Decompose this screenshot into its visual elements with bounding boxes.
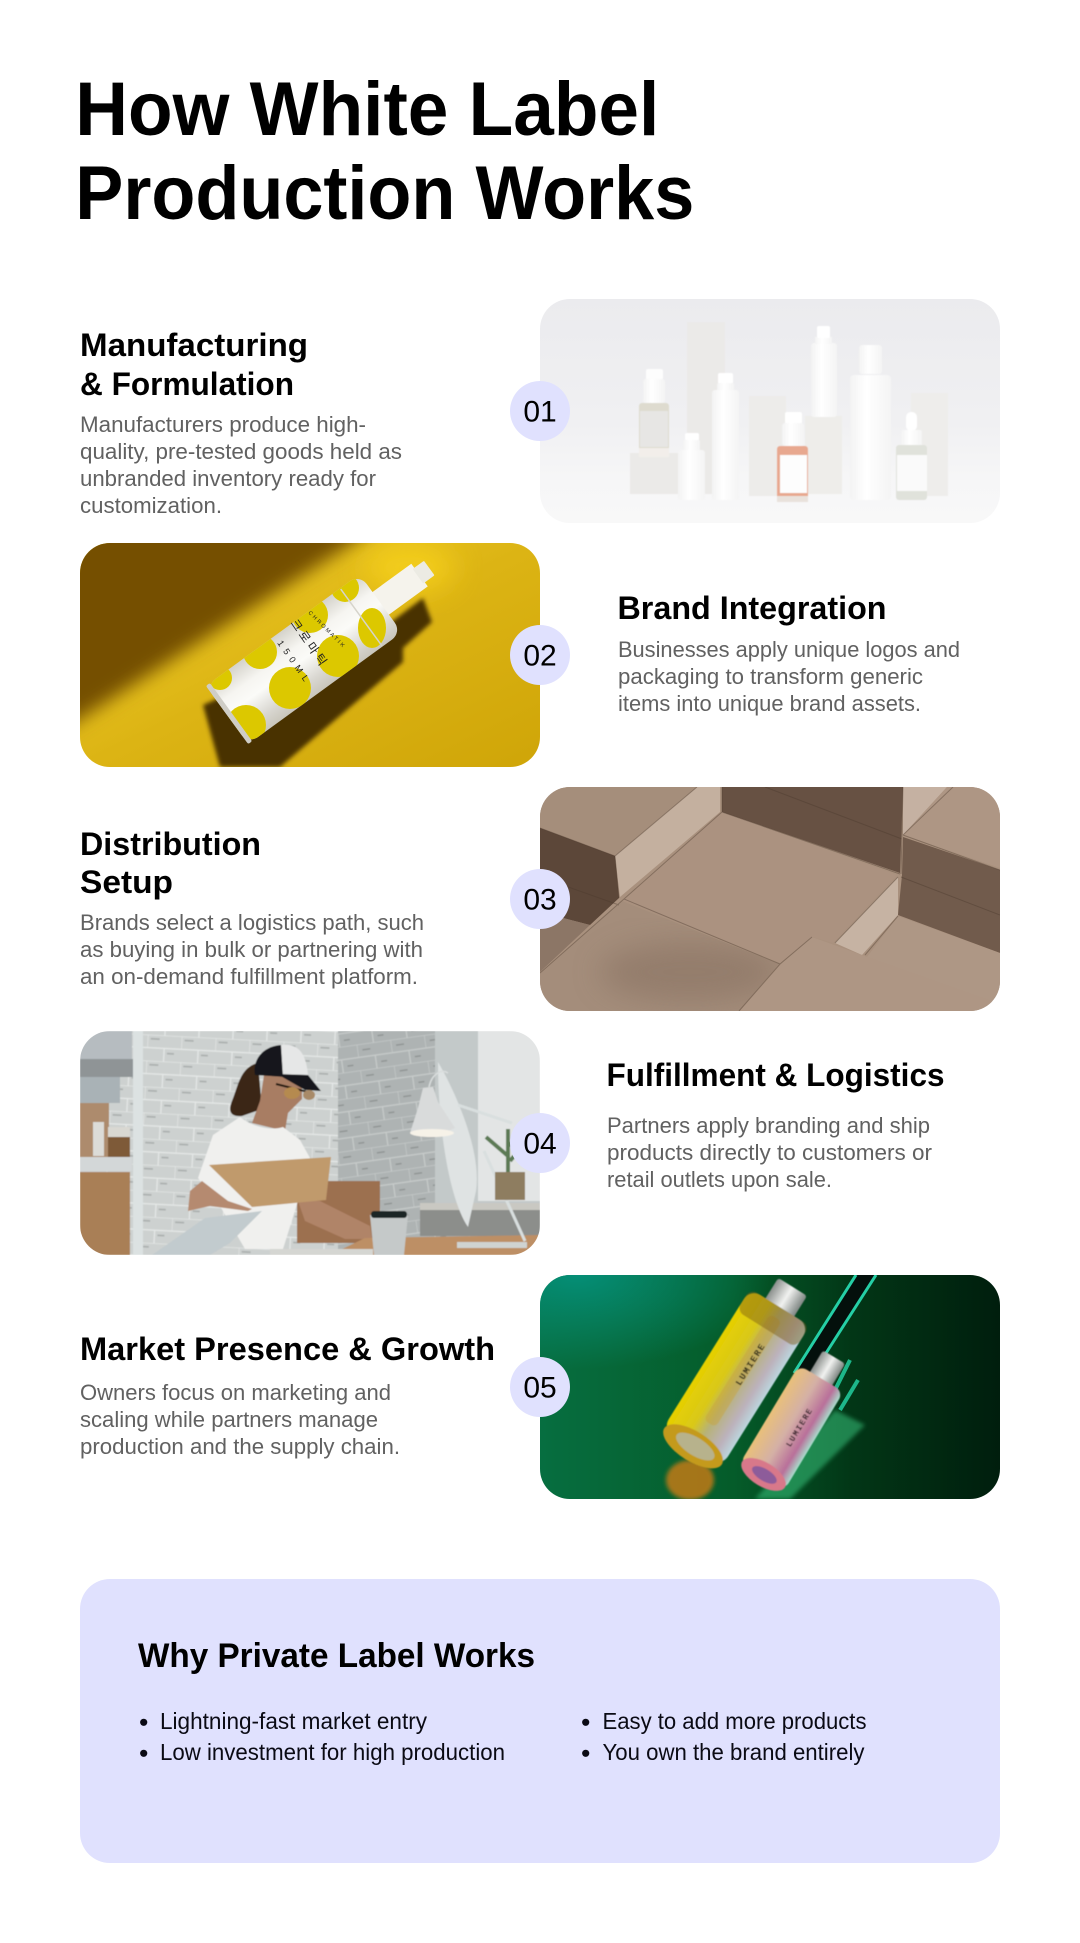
kraft envelope <box>209 1157 331 1207</box>
step 02 photo: yellow pump bottle: CHROMATIK <box>307 610 347 650</box>
step 01 heading: Manufacturing <box>80 327 308 363</box>
panel: why private label works <box>80 1579 1000 1863</box>
step 03 description: Brands select a logistics path, such <box>80 910 424 935</box>
step 01 description: customization. <box>80 493 222 518</box>
step 01 heading: & Formulation <box>80 366 294 402</box>
step 05 heading: Market Presence & Growth <box>80 1331 495 1367</box>
step 05 number badge: 05 <box>523 1372 557 1404</box>
desk <box>330 1235 540 1255</box>
step 04 description: retail outlets upon sale. <box>607 1167 832 1192</box>
benefit list right column <box>582 1708 866 1765</box>
step 03 photo: cardboard boxes <box>540 787 1000 1011</box>
hair <box>230 1063 262 1116</box>
step 05 photo: iridescent serum bottles <box>540 1268 1000 1500</box>
benefit list left column: Low investment for high production <box>160 1739 505 1765</box>
reflections <box>666 1460 714 1500</box>
step 02 photo: yellow pump bottle: 크로마틱 <box>288 617 331 671</box>
grey bag <box>152 1211 262 1255</box>
monitor <box>438 1062 477 1227</box>
step 04 description: Partners apply branding and ship <box>607 1113 930 1138</box>
benefit list right column: You own the brand entirely <box>602 1739 865 1765</box>
glasses <box>276 1084 312 1093</box>
step 05 description: production and the supply chain. <box>80 1434 400 1459</box>
benefit list left column <box>140 1708 505 1765</box>
step 02 photo: yellow pump bottle <box>80 543 540 767</box>
step 05 description: Owners focus on marketing and <box>80 1380 391 1405</box>
step 02 photo: yellow pump bottle: 150ML <box>275 638 314 687</box>
lamp <box>410 1086 442 1132</box>
step 01 number badge <box>510 381 570 441</box>
step 04 number badge: 04 <box>523 1128 557 1160</box>
step 05 description <box>80 1380 400 1459</box>
step 03 number badge <box>510 869 570 929</box>
shelf <box>80 1031 132 1059</box>
left arm <box>188 1181 252 1211</box>
step 03 heading: Distribution <box>80 826 261 862</box>
step 05 number badge <box>510 1357 570 1417</box>
step 01: manufacturing and formulation <box>80 299 1000 523</box>
step 03 heading: Setup <box>80 864 173 900</box>
coffee cup <box>370 1215 408 1255</box>
step 01 description: quality, pre-tested goods held as <box>80 439 402 464</box>
step 04: fulfillment and logistics <box>80 1031 944 1255</box>
step 03 description: as buying in bulk or partnering with <box>80 937 423 962</box>
step 02 description <box>618 637 960 716</box>
step 01 heading <box>80 327 308 402</box>
window <box>435 1031 540 1206</box>
right arm <box>298 1201 372 1239</box>
step 05 photo: iridescent serum bottles: LUMIERE <box>785 1406 816 1449</box>
step 05 description: scaling while partners manage <box>80 1407 378 1432</box>
benefit list right column: Easy to add more products <box>602 1708 866 1734</box>
step 03 description: an on-demand fulfillment platform. <box>80 964 418 989</box>
step 01 photo: white cosmetic bottles <box>540 299 1000 523</box>
step 05: market presence and growth <box>80 1268 1000 1500</box>
title: How White Label <box>75 67 659 152</box>
step 02 description: Businesses apply unique logos and <box>618 637 960 662</box>
step 04 description: products directly to customers or <box>607 1140 932 1165</box>
cardboard box behind <box>297 1181 380 1243</box>
step 01 description <box>80 412 402 518</box>
step 01 description: Manufacturers produce high- <box>80 412 366 437</box>
step 03 description <box>80 910 424 989</box>
step 04 heading: Fulfillment & Logistics <box>606 1057 944 1093</box>
bottle cast shadow <box>203 598 432 767</box>
step 02 description: packaging to transform generic <box>618 664 923 689</box>
step 02 heading: Brand Integration <box>618 590 886 626</box>
step 04 photo: woman packing at a desk <box>80 1031 540 1255</box>
step 03 number badge: 03 <box>523 884 557 916</box>
cap <box>255 1045 285 1077</box>
plant <box>495 1172 525 1200</box>
step 02 description: items into unique brand assets. <box>618 691 921 716</box>
shirt <box>198 1117 310 1249</box>
step 05 photo: iridescent serum bottles: LUMIERE <box>734 1341 768 1388</box>
step 03: distribution setup <box>80 787 1000 1011</box>
panel heading: Why Private Label Works <box>138 1637 535 1675</box>
title: Production Works <box>75 151 694 236</box>
benefit list left column: Lightning-fast market entry <box>160 1708 427 1734</box>
step 03 heading <box>80 826 261 900</box>
step 04 number badge <box>510 1113 570 1173</box>
step 02 number badge <box>510 625 570 685</box>
title <box>75 67 694 236</box>
neck and face <box>252 1075 302 1131</box>
step 01 number badge: 01 <box>523 396 557 428</box>
step 02: brand integration <box>80 543 959 767</box>
step 04 description <box>607 1113 932 1192</box>
step 01 description: unbranded inventory ready for <box>80 466 376 491</box>
step 02 number badge: 02 <box>523 640 557 672</box>
